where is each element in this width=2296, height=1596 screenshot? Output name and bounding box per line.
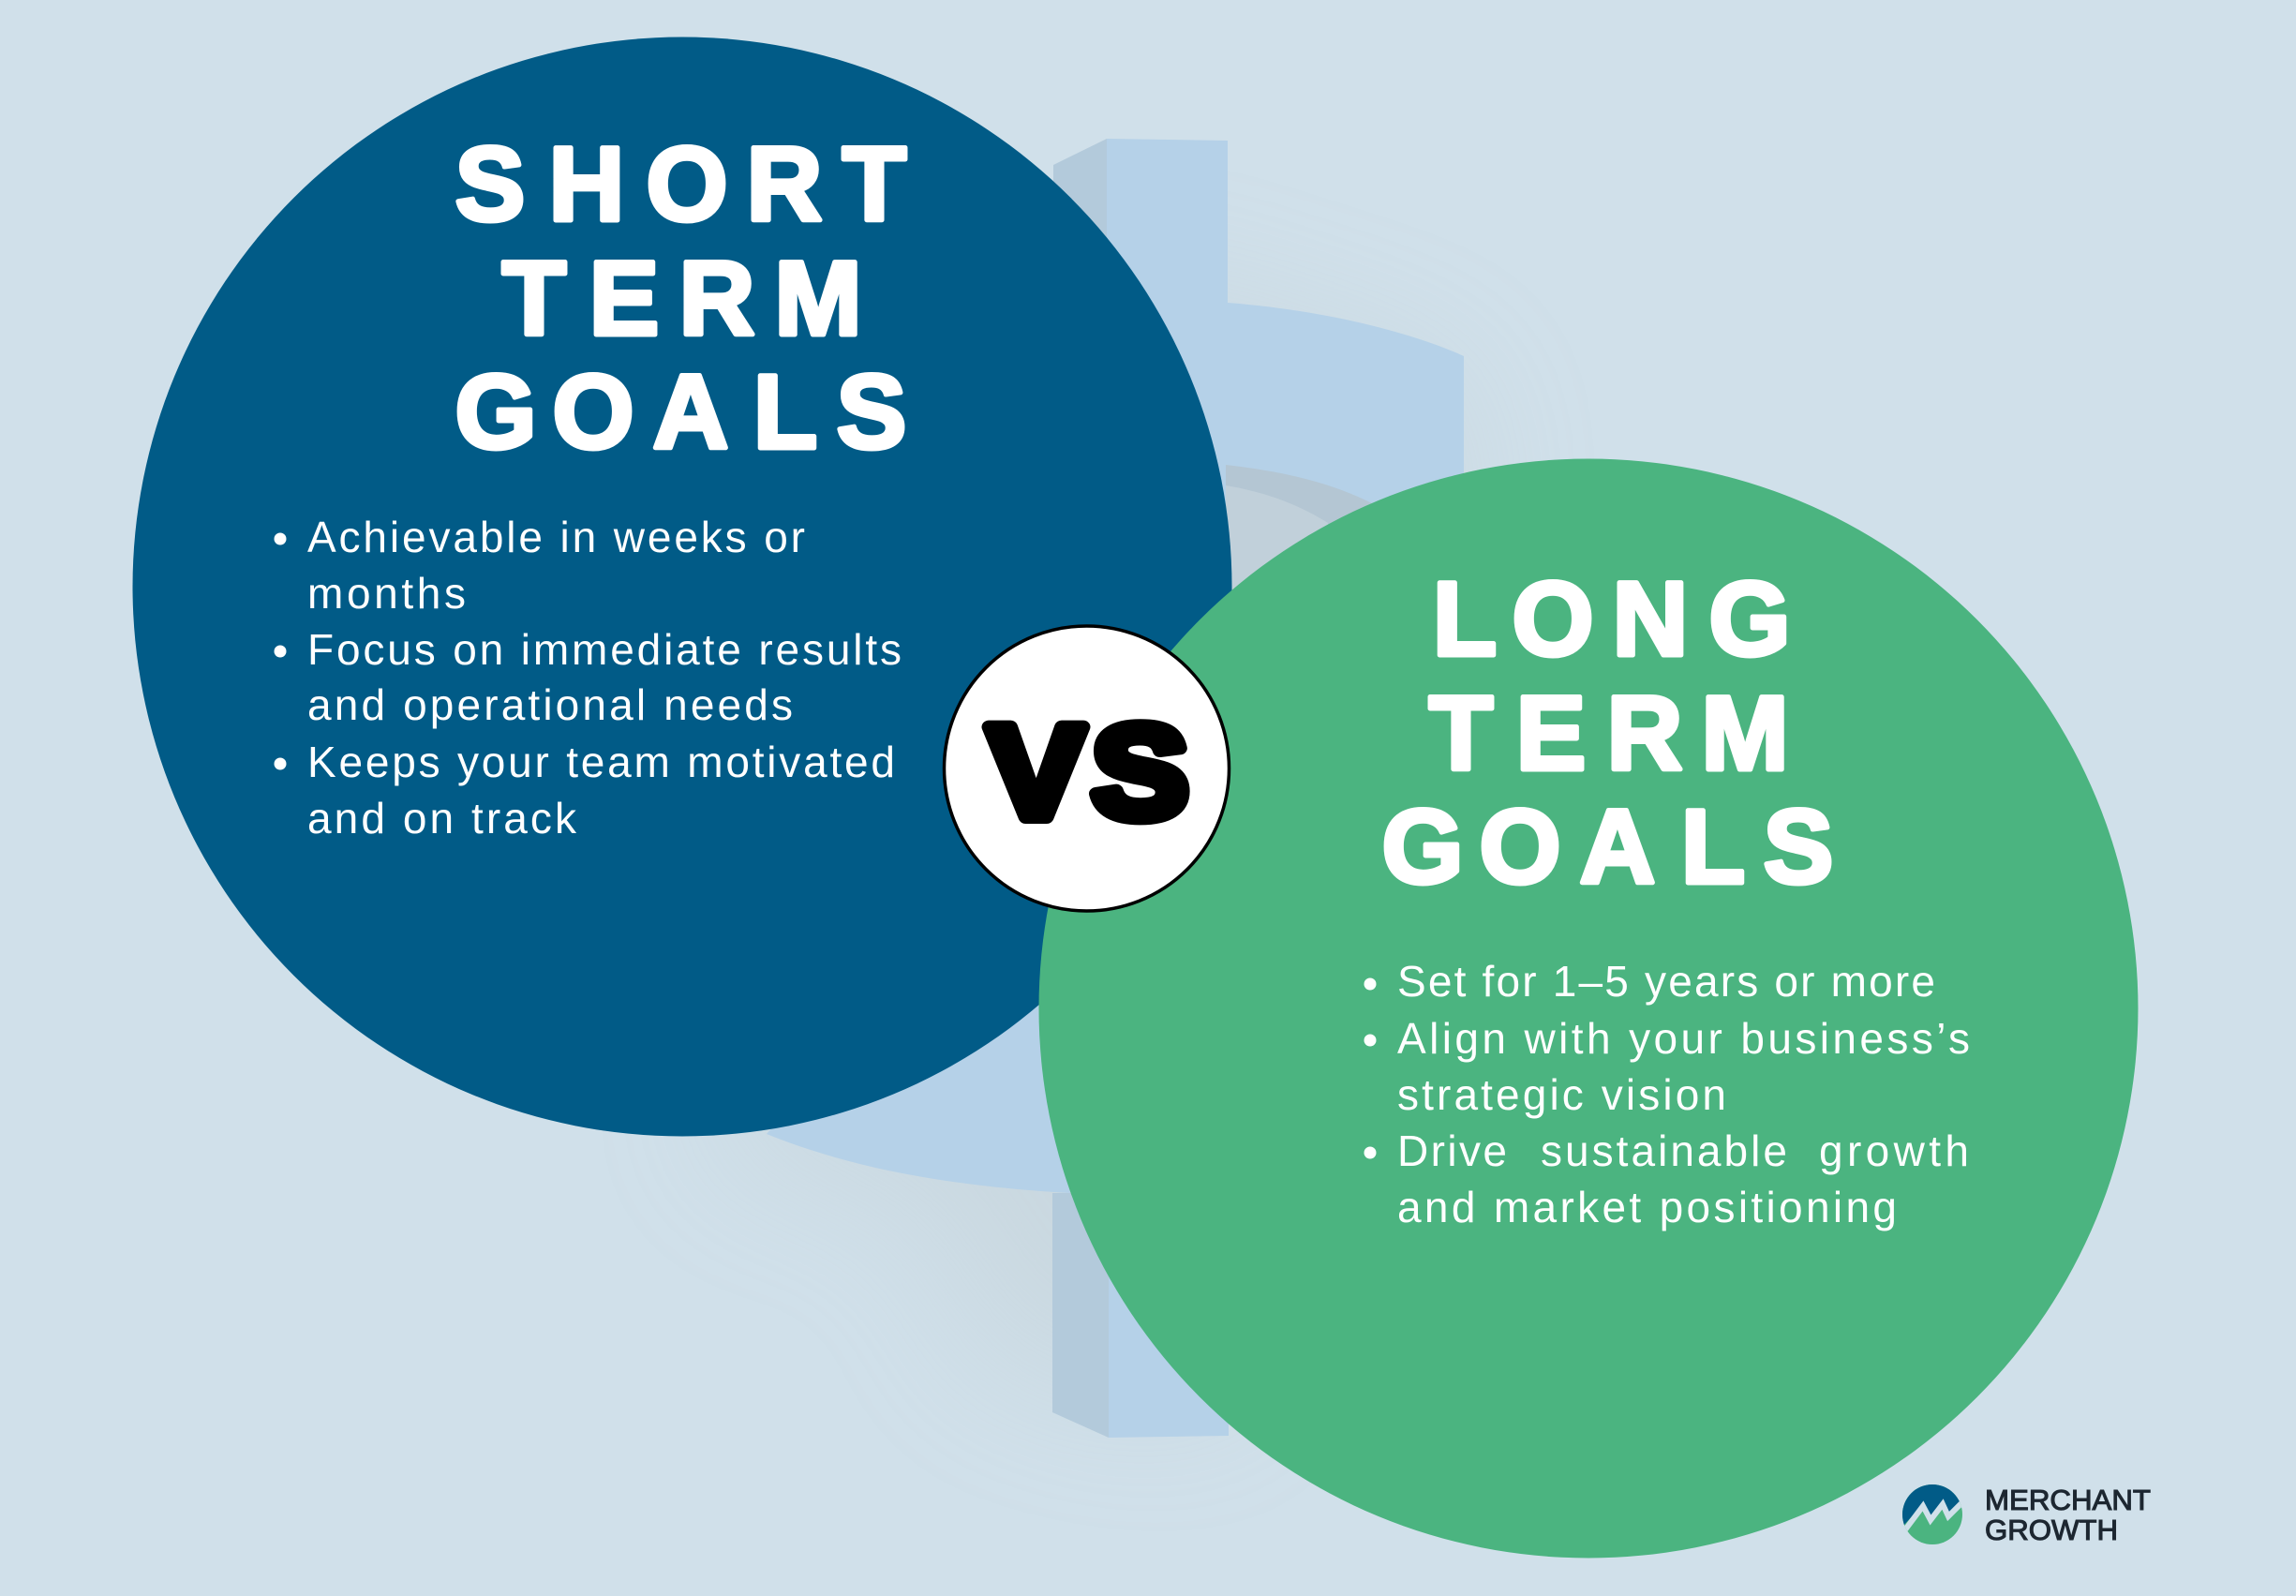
heading: short term goals: TERM xyxy=(502,240,862,357)
green circle xyxy=(1038,459,2139,1558)
long term bullet list xyxy=(1364,957,1970,1231)
dollar sign backdrop xyxy=(767,139,1464,1438)
blue circle xyxy=(133,37,1231,1136)
panel: long term goals xyxy=(1038,459,2139,1558)
long term bullet list: growth xyxy=(1819,1126,1969,1175)
heading: long term goals: TERM xyxy=(1429,675,1789,792)
background shadow xyxy=(712,281,1462,1406)
logo wordmark: GROWTH xyxy=(1985,1514,2118,1546)
logo wordmark: MERCHANT xyxy=(1985,1484,2151,1516)
heading: short term goals: SHORT xyxy=(455,126,906,243)
long term bullet list: sustainable xyxy=(1541,1126,1787,1175)
panel: short term goals xyxy=(133,37,1231,1136)
heading: long term goals xyxy=(1381,560,1833,905)
dollar bar top side xyxy=(1053,139,1107,300)
heading: short term goals xyxy=(455,126,906,470)
heading: long term goals: LONG xyxy=(1433,560,1791,678)
dollar inner face xyxy=(1226,485,1331,675)
dollar bar bottom side xyxy=(1052,1193,1109,1438)
vs badge: VS xyxy=(988,699,1188,845)
heading: long term goals: GOALS xyxy=(1381,788,1833,905)
short term bullet list: and on track xyxy=(307,794,577,843)
dollar inner band xyxy=(1226,465,1372,675)
short term bullet list: and operational needs xyxy=(307,680,793,729)
short term bullet list: Focus on immediate results xyxy=(307,625,902,674)
dollar body xyxy=(767,139,1464,1438)
heading: short term goals: GOALS xyxy=(455,353,906,470)
long term bullet list: Set for 1–5 years or more xyxy=(1397,957,1935,1006)
icon: growth mountain xyxy=(1902,1484,1962,1544)
short term bullet list: Achievable in weeks or xyxy=(307,513,805,561)
logo: merchant growth xyxy=(1902,1484,2151,1544)
long term bullet list: Drive xyxy=(1397,1126,1507,1175)
short term bullet list xyxy=(274,513,902,843)
long term bullet list: strategic vision xyxy=(1397,1070,1726,1119)
vs badge xyxy=(945,626,1230,911)
long term bullet list: and market positioning xyxy=(1397,1183,1897,1231)
logo wordmark xyxy=(1985,1484,2151,1546)
long term bullet list: Align with your business’s xyxy=(1397,1014,1970,1063)
short term bullet list: Keeps your team motivated xyxy=(307,738,895,786)
short term bullet list: months xyxy=(307,569,466,618)
